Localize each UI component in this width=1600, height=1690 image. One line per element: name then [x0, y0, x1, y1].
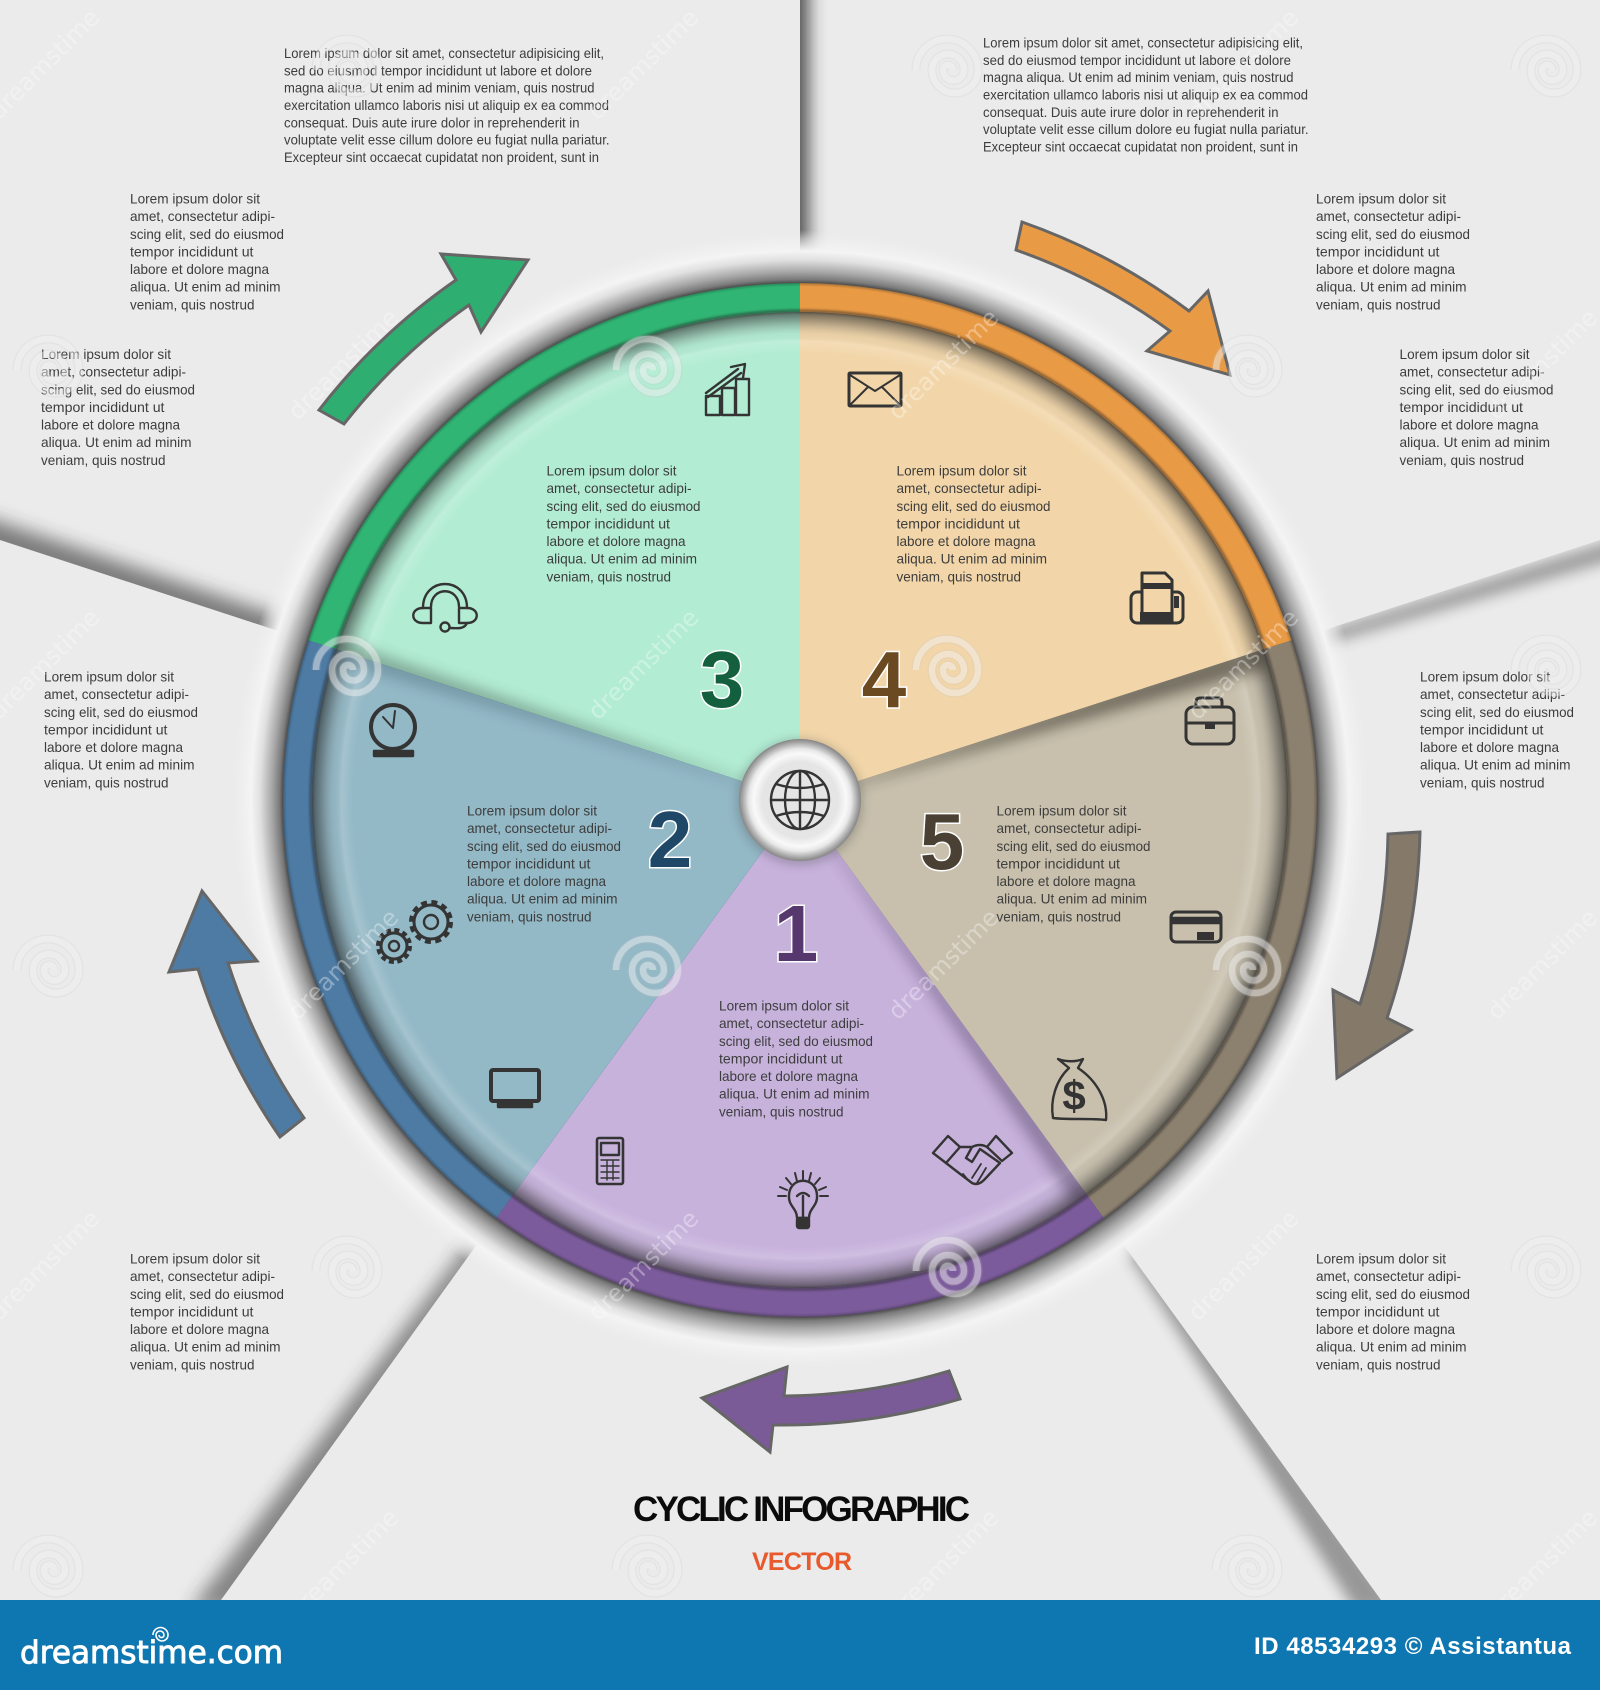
footer banner	[0, 1600, 1600, 1690]
text block: right upper: veniam, quis nostrud	[1316, 297, 1440, 312]
text block: bottom left: scing elit, sed do eiusmod	[130, 1287, 284, 1302]
text block: right second: aliqua. Ut enim ad minim	[1400, 435, 1550, 450]
number 3: 3	[700, 635, 744, 724]
text block: segment 4: amet, consectetur adipi-	[896, 481, 1042, 496]
watermark text: dreamstime	[282, 303, 404, 425]
text block: right second: amet, consectetur adipi-	[1400, 365, 1544, 380]
panel: segment 4 orange	[800, 283, 1292, 800]
text block: segment 5: veniam, quis nostrud	[996, 909, 1121, 924]
arrow: green	[319, 254, 528, 424]
text block: segment 1	[719, 998, 873, 1119]
text block: segment 5: tempor incididunt ut	[996, 856, 1120, 871]
text block: right upper: amet, consectetur adipi-	[1316, 209, 1461, 224]
text block: left second: labore et dolore magna	[41, 418, 180, 432]
text block: top left wide: magna aliqua. Ut enim ad minim veniam, quis nostrud	[284, 81, 594, 96]
text block: segment 5: amet, consectetur adipi-	[996, 821, 1142, 836]
text block: top right wide: voluptate velit esse cillum dolore eu fugiat nulla pariatur.	[983, 122, 1308, 137]
watermark text: dreamstime	[882, 903, 1004, 1025]
text block: right third: scing elit, sed do eiusmod	[1420, 705, 1574, 720]
text block: segment 4: Lorem ipsum dolor sit	[896, 464, 1027, 478]
icon: printer	[1131, 573, 1183, 623]
text block: bottom right: Lorem ipsum dolor sit	[1316, 1252, 1446, 1266]
text block: segment 4: tempor incididunt ut	[896, 516, 1020, 531]
panel: segment 2 blue	[283, 640, 800, 1218]
text block: left upper: tempor incididunt ut	[130, 244, 254, 259]
text block: left third: aliqua. Ut enim ad minim	[44, 758, 194, 773]
text block: left second	[41, 347, 195, 468]
text block: segment 3: amet, consectetur adipi-	[546, 481, 692, 496]
text block: top left wide: sed do eiusmod tempor incididunt ut labore et dolore	[284, 63, 592, 78]
icon: headset	[413, 584, 477, 632]
text block: segment 2: scing elit, sed do eiusmod	[467, 839, 621, 854]
central hub	[737, 739, 863, 865]
text block: left third: veniam, quis nostrud	[44, 775, 168, 790]
text block: segment 4	[896, 464, 1050, 584]
arrow: taupe	[1333, 832, 1420, 1078]
overlap shadows between segments	[335, 640, 1268, 1205]
text block: segment 2: aliqua. Ut enim ad minim	[467, 892, 618, 907]
text block: segment 2: tempor incididunt ut	[467, 856, 591, 871]
text block: segment 2: labore et dolore magna	[467, 874, 606, 889]
watermark text: dreamstime	[1182, 603, 1304, 725]
text block: top right wide: Excepteur sint occaecat cupidatat non proident, sunt in	[983, 140, 1298, 154]
text block: right second: veniam, quis nostrud	[1400, 453, 1524, 468]
watermark text: dreamstime	[582, 603, 704, 725]
text block: segment 3: scing elit, sed do eiusmod	[546, 499, 700, 514]
text block: top right wide: Lorem ipsum dolor sit amet, consectetur adipisicing elit,	[983, 36, 1303, 50]
text block: right third	[1420, 670, 1574, 790]
text block: top left wide: Lorem ipsum dolor sit amet, consectetur adipisicing elit,	[284, 46, 604, 61]
image id and author: ID 48534293 © Assistantua	[1254, 1633, 1572, 1660]
text block: segment 3: veniam, quis nostrud	[546, 569, 671, 584]
text block: segment 3: aliqua. Ut enim ad minim	[546, 552, 697, 567]
text block: segment 1: veniam, quis nostrud	[719, 1104, 844, 1119]
text block: right upper: tempor incididunt ut	[1316, 244, 1440, 259]
text block: left upper: veniam, quis nostrud	[130, 297, 254, 312]
icon: envelope	[849, 373, 901, 406]
text block: left second: scing elit, sed do eiusmod	[41, 382, 195, 397]
logo spiral	[153, 1628, 168, 1641]
subtitle: VECTOR	[752, 1548, 852, 1576]
text block: right upper: scing elit, sed do eiusmod	[1316, 227, 1470, 242]
arrow: purple	[702, 1367, 960, 1452]
text block: right second: tempor incididunt ut	[1400, 400, 1523, 415]
icon: clock	[371, 705, 415, 756]
text block: left third: labore et dolore magna	[44, 740, 183, 755]
text block: bottom left	[130, 1252, 284, 1372]
text block: bottom right: labore et dolore magna	[1316, 1322, 1455, 1337]
icon: handshake	[933, 1136, 1012, 1184]
panel: segment 5 taupe	[800, 640, 1317, 1218]
text block: segment 2: Lorem ipsum dolor sit	[467, 804, 597, 818]
text block: right third: labore et dolore magna	[1420, 740, 1559, 755]
text block: top right wide: exercitation ullamco laboris nisi ut aliquip ex ea commod	[983, 88, 1308, 102]
text block: top right wide: consequat. Duis aute irure dolor in reprehenderit in	[983, 105, 1278, 120]
text block: bottom left: Lorem ipsum dolor sit	[130, 1252, 260, 1266]
icon: briefcase	[1186, 698, 1234, 744]
text block: segment 5: Lorem ipsum dolor sit	[996, 804, 1127, 818]
text block: right upper: Lorem ipsum dolor sit	[1316, 192, 1446, 206]
watermark text: dreamstime	[1182, 3, 1304, 125]
text block: left upper: scing elit, sed do eiusmod	[130, 227, 284, 242]
text block: bottom left: veniam, quis nostrud	[130, 1357, 254, 1372]
cyclic diagram	[283, 283, 1317, 1317]
panel: segment 1 purple	[496, 800, 1104, 1317]
icon: money bag	[1052, 1059, 1106, 1120]
number 5: 5	[920, 797, 964, 886]
text block: segment 5: labore et dolore magna	[996, 874, 1136, 889]
number 4: 4	[862, 635, 907, 724]
watermark text: dreamstime	[582, 1204, 704, 1326]
text block: top right wide: sed do eiusmod tempor incididunt ut labore et dolore	[983, 53, 1291, 68]
text block: segment 4: labore et dolore magna	[896, 534, 1036, 549]
text block: right second: labore et dolore magna	[1400, 418, 1539, 432]
text block: segment 1: labore et dolore magna	[719, 1069, 858, 1084]
icon: globe	[771, 771, 829, 829]
text block: right upper: aliqua. Ut enim ad minim	[1316, 280, 1466, 295]
text block: segment 4: scing elit, sed do eiusmod	[896, 499, 1050, 514]
text block: segment 1: scing elit, sed do eiusmod	[719, 1034, 873, 1049]
text block: right third: veniam, quis nostrud	[1420, 775, 1544, 790]
text block: bottom right: scing elit, sed do eiusmod	[1316, 1287, 1470, 1302]
text block: left second: tempor incididunt ut	[41, 400, 165, 415]
text block: right third: tempor incididunt ut	[1420, 722, 1544, 737]
text block: right third: Lorem ipsum dolor sit	[1420, 670, 1550, 684]
icon: monitor	[491, 1070, 539, 1107]
arrow: blue	[169, 891, 304, 1137]
text block: left upper: Lorem ipsum dolor sit	[130, 192, 260, 206]
watermark text: dreamstime	[1182, 1204, 1304, 1326]
text block: segment 1: tempor incididunt ut	[719, 1051, 843, 1066]
text block: left third: scing elit, sed do eiusmod	[44, 705, 198, 720]
text block: bottom left: labore et dolore magna	[130, 1322, 269, 1337]
text block: bottom right: tempor incididunt ut	[1316, 1304, 1440, 1319]
watermark text: dreamstime	[882, 1503, 1004, 1625]
watermark text: dreamstime	[1481, 903, 1600, 1025]
text block: right third: aliqua. Ut enim ad minim	[1420, 758, 1570, 773]
text block: right upper: labore et dolore magna	[1316, 262, 1455, 277]
circle halo	[200, 200, 1400, 1400]
text block: left third: amet, consectetur adipi-	[44, 687, 189, 702]
text block: right second	[1400, 347, 1554, 468]
text block: segment 4: aliqua. Ut enim ad minim	[896, 552, 1047, 567]
icon: money bag: $	[1062, 1072, 1086, 1119]
watermark text: dreamstime	[282, 1503, 404, 1625]
text block: bottom right	[1316, 1252, 1470, 1372]
icon: mobile phone	[597, 1138, 623, 1184]
text block: left second: aliqua. Ut enim ad minim	[41, 435, 192, 450]
icon: light bulb	[778, 1171, 828, 1228]
text block: bottom left: aliqua. Ut enim ad minim	[130, 1340, 280, 1355]
arrow: orange	[1016, 222, 1230, 375]
text block: top left wide: consequat. Duis aute irure dolor in reprehenderit in	[284, 115, 580, 130]
text block: bottom right: veniam, quis nostrud	[1316, 1357, 1440, 1372]
text block: top left wide: exercitation ullamco laboris nisi ut aliquip ex ea commod	[284, 98, 609, 113]
text block: left second: amet, consectetur adipi-	[41, 365, 186, 380]
text block: segment 3: Lorem ipsum dolor sit	[546, 464, 677, 478]
number 2: 2	[648, 795, 692, 884]
text block: left upper: labore et dolore magna	[130, 262, 269, 277]
text block: bottom left: tempor incididunt ut	[130, 1304, 254, 1319]
logo text: dreamstime.com	[20, 1635, 283, 1671]
text block: top right wide: magna aliqua. Ut enim ad minim veniam, quis nostrud	[983, 70, 1294, 85]
text block: left third: tempor incididunt ut	[44, 722, 168, 737]
text block: right second: Lorem ipsum dolor sit	[1400, 347, 1530, 362]
text block: segment 5: scing elit, sed do eiusmod	[996, 839, 1150, 854]
text block: segment 3: labore et dolore magna	[546, 534, 686, 549]
watermark text: dreamstime	[582, 3, 704, 125]
text block: top left wide	[284, 46, 610, 165]
text block: right third: amet, consectetur adipi-	[1420, 687, 1565, 702]
text block: segment 5: aliqua. Ut enim ad minim	[996, 892, 1147, 907]
text block: left upper: aliqua. Ut enim ad minim	[130, 280, 280, 295]
text block: left upper: amet, consectetur adipi-	[130, 209, 275, 224]
text block: segment 2	[467, 804, 621, 924]
text block: segment 2: amet, consectetur adipi-	[467, 821, 612, 836]
text block: segment 1: aliqua. Ut enim ad minim	[719, 1087, 870, 1102]
text block: segment 3	[546, 464, 700, 584]
text block: bottom right: amet, consectetur adipi-	[1316, 1269, 1461, 1284]
number 1: 1	[774, 889, 818, 978]
watermark text: dreamstime	[1481, 303, 1600, 425]
text block: left third: Lorem ipsum dolor sit	[44, 670, 174, 684]
text block: bottom left: amet, consectetur adipi-	[130, 1269, 275, 1284]
panel: segment 3 green	[308, 283, 800, 800]
text block: top left wide: voluptate velit esse cillum dolore eu fugiat nulla pariatur.	[284, 133, 610, 148]
icon: growth chart	[706, 364, 749, 415]
text block: segment 4: veniam, quis nostrud	[896, 569, 1021, 584]
icon: gears	[378, 902, 451, 962]
icon: credit card	[1171, 912, 1221, 942]
text block: left third	[44, 670, 198, 790]
text block: segment 1: Lorem ipsum dolor sit	[719, 998, 849, 1014]
watermark text: dreamstime	[882, 303, 1004, 425]
text block: right second: scing elit, sed do eiusmod	[1400, 382, 1554, 397]
text block: left upper	[130, 192, 284, 312]
text block: top right wide	[983, 36, 1308, 154]
watermark text: dreamstime	[282, 903, 404, 1025]
text block: segment 3: tempor incididunt ut	[546, 516, 670, 531]
text block: segment 2: veniam, quis nostrud	[467, 909, 592, 924]
text block: segment 5	[996, 804, 1150, 924]
text block: segment 1: amet, consectetur adipi-	[719, 1016, 864, 1031]
text block: left second: veniam, quis nostrud	[41, 453, 166, 468]
text block: bottom right: aliqua. Ut enim ad minim	[1316, 1340, 1466, 1355]
title: CYCLIC INFOGRAPHIC	[633, 1490, 970, 1529]
watermark text: dreamstime	[1481, 1503, 1600, 1625]
text block: top left wide: Excepteur sint occaecat cupidatat non proident, sunt in	[284, 150, 599, 165]
text block: right upper	[1316, 192, 1470, 312]
ring edges and bevel	[283, 283, 1317, 1317]
text block: left second: Lorem ipsum dolor sit	[41, 347, 171, 362]
